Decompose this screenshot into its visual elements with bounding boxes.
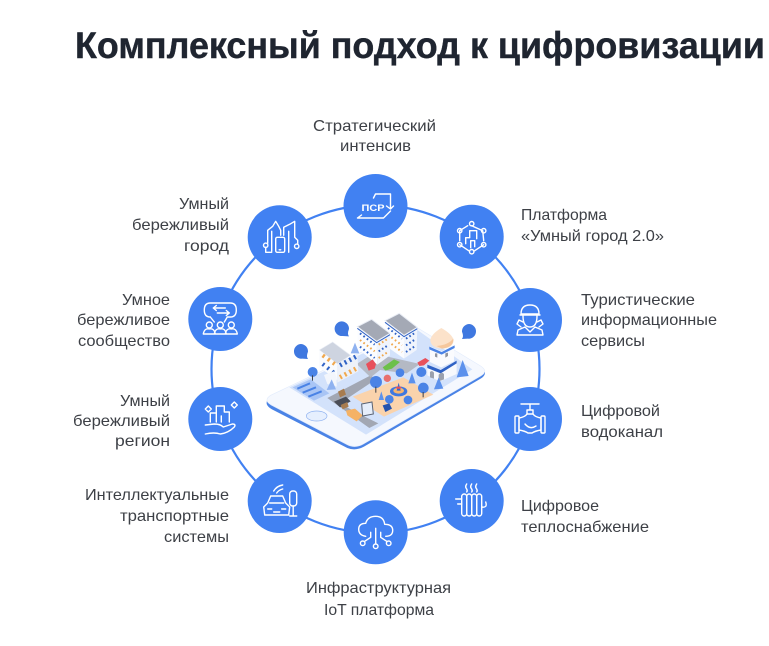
label: smart lean region: регион (115, 433, 170, 450)
icon circle (498, 387, 562, 451)
plaza with fountain (353, 377, 433, 417)
icon circle (498, 288, 562, 352)
label: smart city platform: Платформа (521, 207, 607, 224)
title: Комплексный подход к цифровизации (75, 25, 765, 66)
label: smart lean community: Умное (122, 292, 170, 309)
label: IoT infrastructure platform (306, 580, 451, 619)
label: strategic intensive: интенсив (340, 138, 411, 155)
label: smart lean community (77, 292, 170, 350)
central illustration: smartphone city (267, 313, 485, 449)
node: smart city platform (440, 205, 504, 269)
label: IoT infrastructure platform: IoT платформа (324, 602, 434, 619)
icon: water valve (515, 404, 545, 433)
label: intelligent transport systems: транспортные (120, 508, 229, 525)
icon: IoT cloud (359, 516, 393, 549)
node: strategic intensive (344, 174, 408, 238)
roads (327, 353, 420, 428)
label: smart lean community: сообщество (78, 333, 170, 350)
speech bubble middle (335, 321, 349, 336)
label: digital heat supply: теплоснабжение (521, 519, 649, 536)
solar parking (293, 379, 329, 401)
label: smart lean city: Умный (179, 196, 229, 213)
label: smart lean city: город (184, 238, 230, 255)
apartment block left (357, 319, 390, 365)
icon: car and traffic light (264, 485, 297, 516)
icon circle (440, 205, 504, 269)
label: digital water utility: водоканал (581, 424, 663, 441)
phone body (267, 327, 485, 449)
cars (346, 358, 429, 421)
label: tourist information services (581, 292, 717, 350)
label: intelligent transport systems: системы (164, 529, 229, 546)
apartment block right (385, 313, 417, 359)
node: smart lean region (188, 387, 252, 451)
icon: community chat (203, 303, 237, 334)
bus stop (362, 402, 373, 416)
speech bubble left (294, 344, 308, 359)
icon circle (344, 500, 408, 564)
label: smart lean region: Умный (120, 393, 170, 410)
icon circle (188, 287, 252, 351)
label: tourist information services: информационные (581, 312, 717, 329)
connecting ring (212, 205, 540, 533)
icon: hand holding buildings (205, 402, 237, 434)
label: tourist information services: сервисы (581, 333, 645, 350)
icon circle (440, 469, 504, 533)
node: intelligent transport systems (248, 469, 312, 533)
trees (308, 343, 469, 404)
church (427, 328, 457, 381)
label: digital water utility (581, 403, 663, 441)
node: IoT infrastructure platform (344, 500, 408, 564)
label: smart city platform: «Умный город 2.0» (521, 228, 664, 245)
node: smart lean community (188, 287, 252, 351)
icon circle (248, 205, 312, 269)
icon: PSR arrow: ПСР (362, 203, 385, 214)
label: intelligent transport systems: Интеллектуальные (85, 487, 229, 504)
icon: guide with hat (517, 305, 543, 335)
icon circle (344, 174, 408, 238)
label: intelligent transport systems (85, 487, 229, 546)
icon: platform network (458, 222, 486, 254)
node: digital water utility (498, 387, 562, 451)
label: smart lean community: бережливое (77, 312, 170, 329)
icon: city with smartphone (264, 221, 299, 252)
label: smart lean region (73, 393, 170, 450)
left building (319, 342, 358, 387)
icon circle (188, 387, 252, 451)
label: smart lean city: бережливый (132, 217, 229, 234)
label: strategic intensive (313, 118, 436, 155)
speech bubble right (462, 324, 476, 339)
label: tourist information services: Туристические (581, 292, 695, 309)
label: IoT infrastructure platform: Инфраструктурная (306, 580, 451, 597)
label: smart lean region: бережливый (73, 413, 170, 430)
label: smart city platform (521, 207, 664, 245)
node: smart lean city (248, 205, 312, 269)
label: strategic intensive: Стратегический (313, 118, 436, 135)
label: smart lean city (132, 196, 230, 255)
icon: radiator (456, 484, 486, 516)
node: tourist information services (498, 288, 562, 352)
label: digital water utility: Цифровой (581, 403, 660, 420)
label: digital heat supply: Цифровое (521, 498, 599, 515)
icon circle (248, 469, 312, 533)
node: digital heat supply (440, 469, 504, 533)
label: digital heat supply (521, 498, 649, 536)
